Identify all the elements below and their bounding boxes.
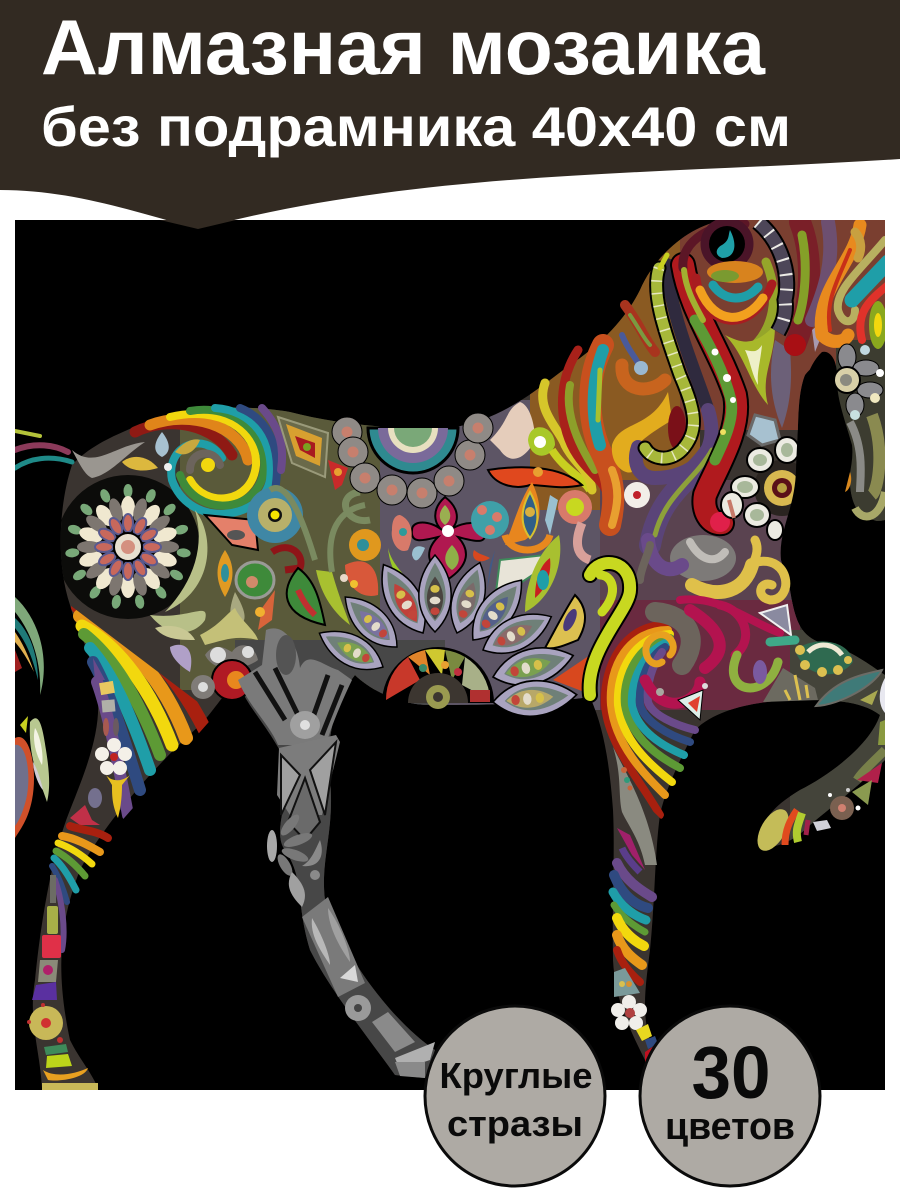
neck: yellow swoosh and lime leaf bbox=[612, 392, 672, 473]
grey petals ring and top mandala bbox=[332, 413, 493, 508]
head ornament bbox=[834, 344, 885, 516]
artwork panel: black square with ornamental horse bbox=[15, 220, 890, 1090]
white flower on the shoulder bbox=[624, 482, 650, 508]
badge text: Круглые bbox=[440, 1055, 592, 1096]
rear leg lower rainbow bbox=[52, 826, 108, 950]
central crimson flower and coral ornaments bbox=[340, 497, 593, 693]
raised lower leg and hoof bbox=[751, 720, 885, 856]
banner: dark header ribbon bbox=[0, 0, 900, 229]
neck: top curl with crescents bbox=[696, 222, 772, 320]
neck: right mane stripes bbox=[784, 222, 888, 356]
badge: round rhinestones bbox=[425, 1006, 605, 1186]
tail: lower left feathers bbox=[15, 597, 49, 838]
small flower and fan on the raised leg bbox=[763, 641, 885, 713]
badge number and caption: 30 bbox=[692, 1031, 770, 1114]
badge: 30 colours bbox=[640, 1006, 820, 1186]
badge number and caption bbox=[665, 1031, 795, 1148]
grey hind leg bbox=[238, 628, 435, 1078]
front leg: grey upper part bbox=[613, 747, 657, 872]
chest: hexagon flower bbox=[720, 436, 798, 541]
banner tip overlapping the artwork bbox=[160, 220, 236, 229]
front shoulder rainbow bbox=[605, 625, 695, 815]
large daisy flower on the hip bbox=[65, 484, 191, 610]
badge text bbox=[440, 1055, 592, 1144]
horse body under-colour bbox=[15, 220, 890, 1090]
fan flower half wheel bbox=[382, 647, 494, 709]
badge text: стразы bbox=[447, 1103, 583, 1144]
neck: lime drip and grey column bbox=[725, 222, 791, 445]
horse: ornamental figure bbox=[15, 220, 890, 1090]
badge number and caption: цветов bbox=[665, 1106, 795, 1148]
rump rainbow spiral bbox=[135, 408, 282, 514]
neck: main mane stripes bbox=[636, 224, 774, 545]
neck: left flame bands bbox=[543, 305, 665, 525]
rear rainbow bbox=[78, 607, 205, 815]
cream leaf, lime swirl and orange lily bbox=[488, 402, 592, 560]
white triangle under chest bbox=[760, 605, 791, 635]
title bbox=[41, 3, 791, 158]
title: Алмазная мозаика bbox=[41, 3, 766, 91]
subtitle: без подрамника 40х40 см bbox=[41, 95, 791, 158]
white triangle under swirl bbox=[656, 683, 708, 720]
hip ornaments: leaves, apple, blue flower bbox=[150, 417, 370, 700]
crimson spray and green lobes bbox=[645, 599, 795, 703]
ornaments above the hip flower bbox=[122, 432, 200, 471]
rear thigh small details bbox=[70, 658, 132, 825]
chest: grey, purple and gold curls bbox=[590, 535, 786, 695]
gap between neck and head bbox=[780, 352, 876, 564]
fan flower on the belly bbox=[312, 555, 578, 720]
front leg rainbow bbox=[613, 863, 652, 982]
tail: upper strip bbox=[15, 431, 145, 478]
rear lower leg and hoof ornaments bbox=[27, 875, 98, 1090]
front hoof ornaments bbox=[611, 968, 658, 1062]
